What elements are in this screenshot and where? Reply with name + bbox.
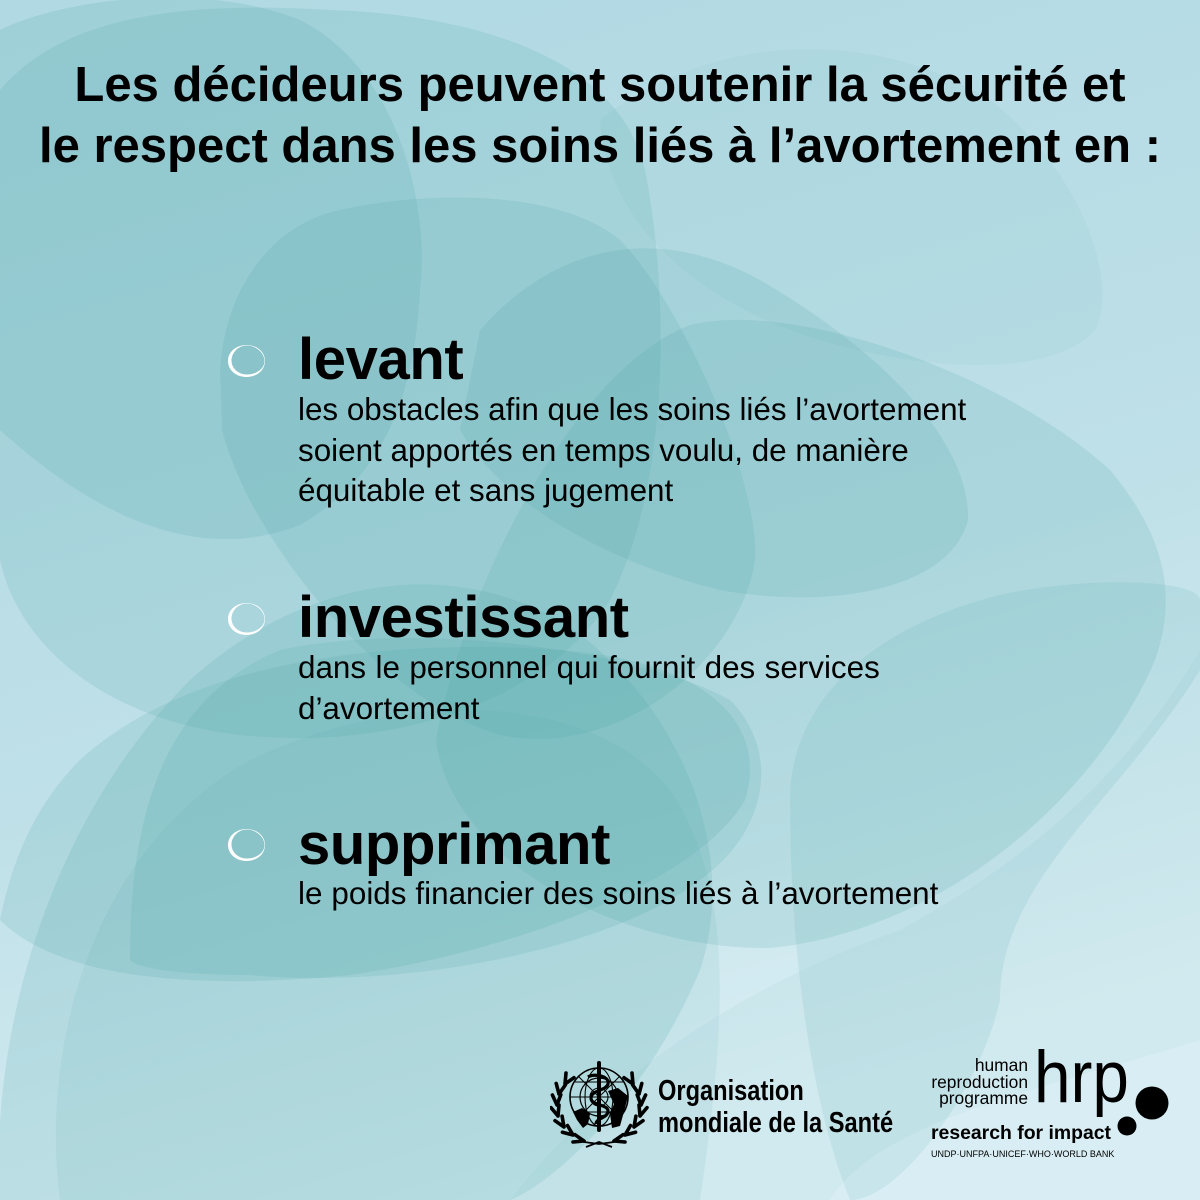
list item 2: investissant: d’avortement — [298, 690, 479, 726]
icon: ring bullet — [228, 345, 265, 377]
programme name: programme — [939, 1088, 1028, 1108]
icon: ring bullet — [228, 829, 265, 861]
list item 3: supprimant: le poids financier des soins liés à l’avortement — [298, 876, 938, 911]
list item 1: levant: levant — [298, 327, 463, 392]
logo: World Health Organization — [550, 1061, 893, 1148]
title: le respect dans les soins liés à l’avortement en : — [39, 118, 1161, 172]
programme name: human — [975, 1055, 1028, 1075]
programme name — [931, 1055, 1028, 1108]
list item 1: levant: équitable et sans jugement — [298, 473, 673, 508]
list item 3: supprimant — [228, 812, 938, 911]
programme name: reproduction — [931, 1072, 1028, 1092]
list item 1: levant: soient apportés en temps voulu, de manière — [298, 432, 909, 468]
organisation name: mondiale de la Santé — [658, 1107, 893, 1139]
organisation name: Organisation — [658, 1075, 804, 1107]
logo: HRP — [931, 1037, 1168, 1159]
partners: UNDP·UNFPA·UNICEF·WHO·WORLD BANK — [931, 1149, 1114, 1159]
list item 2: investissant: investissant — [298, 585, 629, 650]
list item 1: levant — [228, 327, 966, 508]
list item 1: levant: les obstacles afin que les soins liés l’avortement — [298, 392, 966, 427]
icon: WHO emblem — [550, 1061, 649, 1148]
icon: two dots — [1118, 1086, 1168, 1136]
organisation name — [658, 1075, 893, 1139]
list item 2: investissant: dans le personnel qui fournit des services — [298, 650, 880, 685]
tagline: research for impact — [931, 1122, 1111, 1144]
title — [39, 58, 1161, 172]
list item 3: supprimant: supprimant — [298, 812, 610, 877]
title: Les décideurs peuvent soutenir la sécurité et — [74, 58, 1126, 112]
list item 2: investissant — [228, 585, 880, 726]
icon: ring bullet — [228, 603, 265, 635]
hrp wordmark: hrp — [1034, 1037, 1129, 1118]
